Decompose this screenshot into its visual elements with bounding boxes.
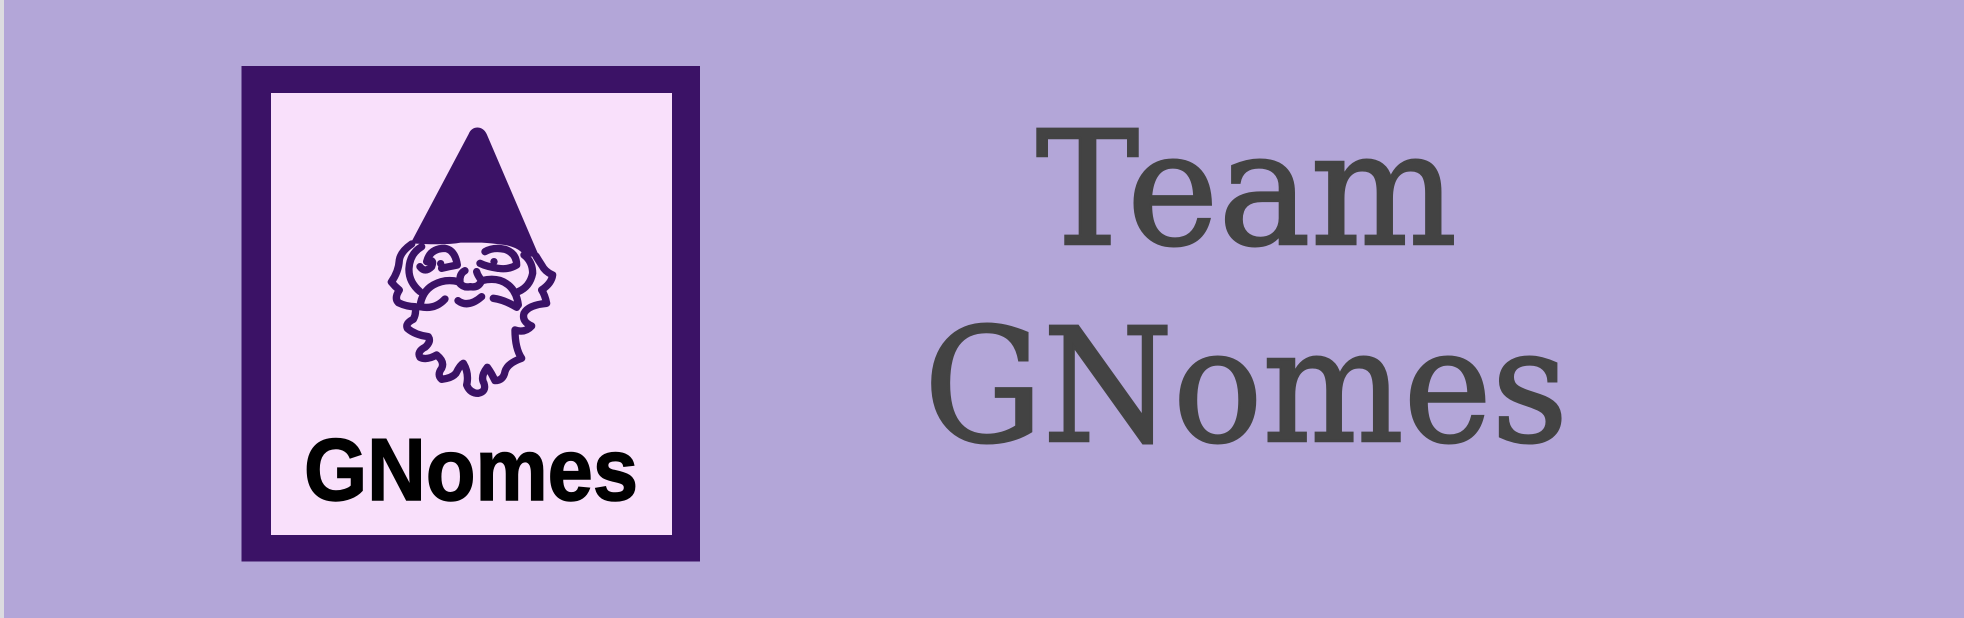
logo panel — [242, 66, 700, 562]
icon: gnome — [391, 127, 553, 393]
gnome eyes — [437, 260, 444, 267]
gnome beard and face lines — [391, 244, 553, 393]
title line 1: Team — [1036, 98, 1457, 282]
gnome hat — [411, 127, 540, 258]
logo wordmark: GNomes — [304, 420, 638, 519]
title line 2: GNomes — [924, 295, 1568, 479]
title — [924, 98, 1568, 479]
